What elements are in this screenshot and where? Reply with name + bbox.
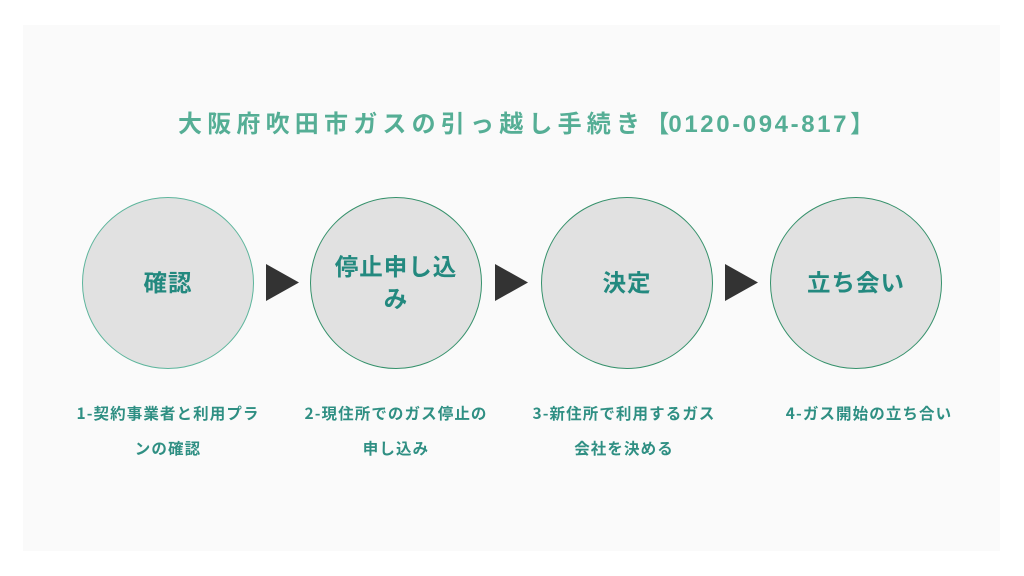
- step 4 circle: 立ち会い: [770, 197, 942, 369]
- caption 2: [304, 402, 488, 459]
- step 1 circle: 確認: [82, 197, 254, 369]
- step 2 circle: 停止申し込み: み: [384, 280, 408, 314]
- step 1 circle: 確認: 確認: [144, 264, 192, 298]
- step 4 circle: 立ち会い: 立ち会い: [807, 264, 905, 298]
- caption 1: 1-契約事業者と利用プラ: [76, 402, 260, 424]
- caption 1: ンの確認: [135, 437, 201, 459]
- caption 3: 会社を決める: [574, 437, 674, 459]
- arrow 3: [725, 264, 758, 301]
- caption 4: 4-ガス開始の立ち合い: [786, 402, 952, 424]
- caption 1: [76, 402, 260, 459]
- caption 2: 2-現住所でのガス停止の: [304, 402, 488, 424]
- arrow 2: [495, 264, 528, 301]
- caption 2: 申し込み: [363, 437, 429, 459]
- title: 大阪府吹田市ガスの引っ越し手続き【0120-094-817】: [178, 104, 879, 139]
- caption 3: [532, 402, 716, 459]
- step 3 circle: 決定: [541, 197, 713, 369]
- arrow 1: [266, 264, 299, 301]
- step 2 circle: 停止申し込み: [310, 197, 482, 369]
- step 2 circle: 停止申し込み: 停止申し込: [335, 248, 457, 282]
- caption 3: 3-新住所で利用するガス: [532, 402, 716, 424]
- step 3 circle: 決定: 決定: [602, 264, 652, 298]
